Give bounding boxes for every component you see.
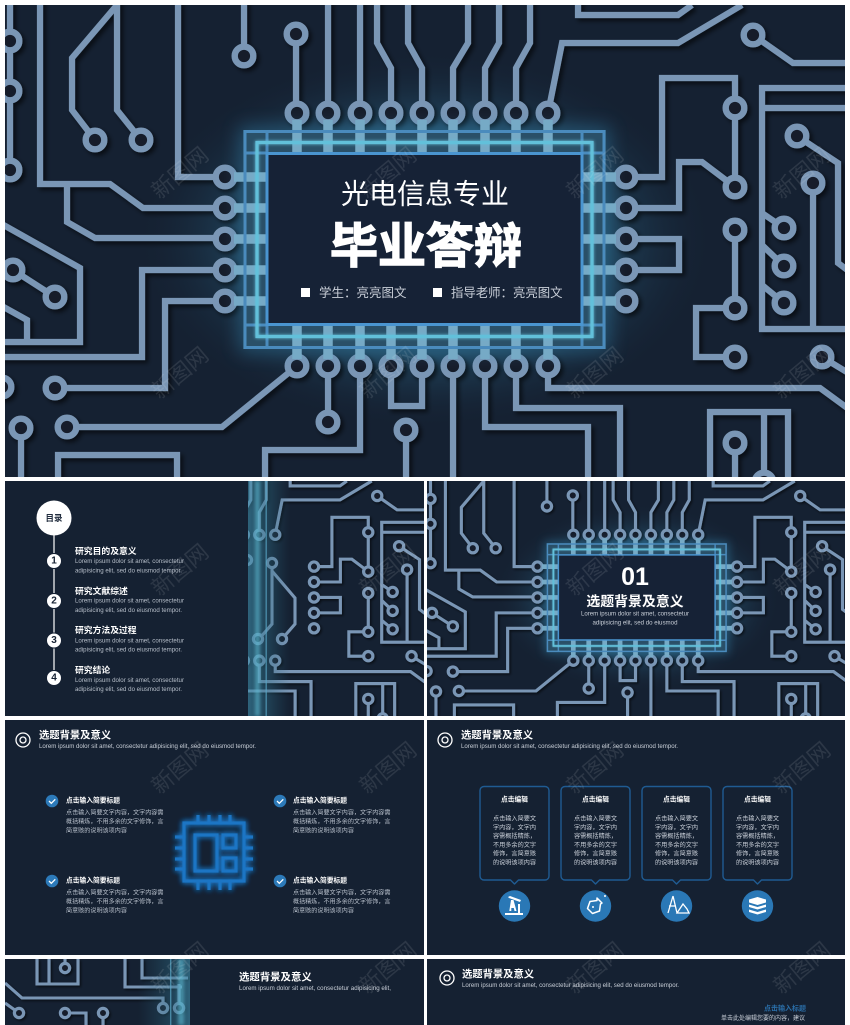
card 1 xyxy=(480,786,549,884)
watermarks: 新图网 xyxy=(769,737,835,799)
point bottom right: 点击输入简要文字内容，文字内容需 xyxy=(293,888,390,896)
card 2 xyxy=(561,786,630,884)
watermarks: 新图网 xyxy=(562,142,628,204)
card 4: 不用多余的文字 xyxy=(736,841,779,849)
point bottom right: 简意赅的说明该项内容 xyxy=(293,906,354,914)
subtitle: 光电信息专业 xyxy=(341,178,509,210)
icon: stacked books xyxy=(742,890,773,922)
watermarks xyxy=(147,142,835,999)
central chip xyxy=(234,120,616,359)
card 3: 修饰，言简意赅 xyxy=(655,850,698,858)
header xyxy=(16,728,256,750)
watermarks: 新图网 xyxy=(147,737,213,799)
icon: compass and mountains xyxy=(661,890,692,922)
card 4: 容需概括精炼， xyxy=(736,832,779,840)
watermarks: 新图网 xyxy=(562,539,628,601)
point top right: 概括精炼，不用多余的文字修饰，言 xyxy=(293,818,390,826)
watermarks: 新图网 xyxy=(355,142,421,204)
header: 选题背景及意义 xyxy=(462,968,535,980)
card 3: 不用多余的文字 xyxy=(655,841,698,849)
point top right: 简意赅的说明该项内容 xyxy=(293,826,354,834)
card 4: 点击编辑 xyxy=(744,794,771,804)
card 1: 点击编辑 xyxy=(501,794,528,804)
icon: flask xyxy=(580,890,611,922)
card 2: 不用多余的文字 xyxy=(574,841,617,849)
header xyxy=(440,968,679,989)
contents item 3 xyxy=(75,624,184,654)
card 2: 修饰，言简意赅 xyxy=(574,850,617,858)
slide 7: cropped text slide xyxy=(427,959,845,1025)
contents item 1 xyxy=(75,545,184,574)
point top right xyxy=(274,795,390,834)
card 1: 的说明该项内容 xyxy=(493,858,536,866)
title and subtitle xyxy=(239,970,391,992)
section title: 选题背景及意义 xyxy=(586,593,684,609)
point bottom left: 简意赅的说明该项内容 xyxy=(66,906,127,914)
main title: 毕业答辩 xyxy=(330,220,522,274)
card 4 xyxy=(723,786,792,884)
card 4: 字内容，文字内 xyxy=(736,823,779,831)
circuit image xyxy=(5,959,190,1025)
section description: adipisicing elit, sed do eiusmod xyxy=(592,620,678,626)
contents item 4: Lorem ipsum dolor sit amet, consectetur xyxy=(75,678,184,684)
card 1: 字内容，文字内 xyxy=(493,823,536,831)
point bottom right xyxy=(274,875,390,914)
watermarks: 新图网 xyxy=(147,142,213,204)
card 2: 点击编辑 xyxy=(582,794,609,804)
contents item 3: adipisicing elit, sed do eiusmod tempor. xyxy=(75,648,182,654)
header: 选题背景及意义 xyxy=(461,728,534,742)
card 3: 容需概括精炼， xyxy=(655,832,698,840)
point bottom left: 概括精炼，不用多余的文字修饰，言 xyxy=(66,898,164,906)
card 1: 不用多余的文字 xyxy=(493,841,536,849)
section description xyxy=(581,612,689,626)
circuit and chip, small xyxy=(422,479,848,723)
slide 4: four points around chip icon xyxy=(5,720,424,955)
point top right: 点击输入简要标题 xyxy=(293,796,347,804)
point top left: 概括精炼，不用多余的文字修饰，言 xyxy=(66,818,164,826)
body line: 单击此处编辑您要的内容，建议 xyxy=(721,1014,805,1022)
point top left: 简意赅的说明该项内容 xyxy=(66,826,127,834)
contents item 1: Lorem ipsum dolor sit amet, consectetur xyxy=(75,559,184,565)
point top left: 点击输入简要文字内容，文字内容需 xyxy=(66,808,164,816)
circuit board background xyxy=(0,0,850,491)
timeline: 3 xyxy=(51,635,57,646)
contents item 1: adipisicing elit, sed do eiusmod tempor. xyxy=(75,568,182,574)
header: 选题背景及意义 xyxy=(39,728,112,742)
contents item 1: 研究目的及意义 xyxy=(75,545,137,556)
contents item 2 xyxy=(75,585,184,614)
watermarks: 新图网 xyxy=(562,937,628,999)
contents item 2: adipisicing elit, sed do eiusmod tempor. xyxy=(75,608,182,614)
contents item 2: 研究文献综述 xyxy=(75,585,128,596)
point top left xyxy=(46,795,164,834)
slide 5: four callout cards xyxy=(427,720,845,955)
contents item 3: 研究方法及过程 xyxy=(75,624,137,635)
student line: 学生：亮亮图文 xyxy=(319,285,407,300)
point bottom left xyxy=(46,875,164,914)
card 2: 容需概括精炼， xyxy=(574,832,617,840)
card 3: 点击输入简要文 xyxy=(655,814,698,822)
card 2: 的说明该项内容 xyxy=(574,858,617,866)
watermarks: 新图网 xyxy=(769,342,835,404)
point bottom left: 点击输入简要文字内容，文字内容需 xyxy=(66,888,164,896)
timeline: 4 xyxy=(51,672,57,684)
card 2: 点击输入简要文 xyxy=(574,814,617,822)
watermarks: 新图网 xyxy=(769,142,835,204)
watermarks: 新图网 xyxy=(769,539,835,601)
circuit side image xyxy=(248,481,424,716)
advisor line: 指导老师：亮亮图文 xyxy=(451,285,563,300)
watermarks: 新图网 xyxy=(769,937,835,999)
timeline xyxy=(46,530,62,686)
header xyxy=(438,728,678,750)
title and subtitle: Lorem ipsum dolor sit amet, consectetur adipisicing elit, xyxy=(239,986,391,992)
card 3 xyxy=(642,786,711,884)
watermarks: 新图网 xyxy=(562,342,628,404)
watermarks: 新图网 xyxy=(355,737,421,799)
card 3: 的说明该项内容 xyxy=(655,858,698,866)
watermarks: 新图网 xyxy=(147,937,213,999)
slide 2: contents xyxy=(0,479,425,723)
heading badge xyxy=(36,500,72,536)
point top left: 点击输入简要标题 xyxy=(66,796,120,804)
header: Lorem ipsum dolor sit amet, consectetur adipisicing elit, sed do eiusmod tempor. xyxy=(461,744,678,750)
card 1: 点击输入简要文 xyxy=(493,814,536,822)
watermarks: 新图网 xyxy=(355,937,421,999)
card 3: 字内容，文字内 xyxy=(655,823,698,831)
section description: Lorem ipsum dolor sit amet, consectetur xyxy=(581,612,689,618)
card 2: 字内容，文字内 xyxy=(574,823,617,831)
watermarks: 新图网 xyxy=(147,342,213,404)
point top right: 点击输入简要文字内容，文字内容需 xyxy=(293,808,390,816)
heading badge: 目录 xyxy=(45,513,63,523)
timeline: 1 xyxy=(51,556,57,566)
contents item 2: Lorem ipsum dolor sit amet, consectetur xyxy=(75,598,184,604)
watermarks: 新图网 xyxy=(562,737,628,799)
slide 1: cover xyxy=(0,0,850,491)
card 1: 容需概括精炼， xyxy=(493,832,536,840)
watermarks: 新图网 xyxy=(355,342,421,404)
card 1: 修饰，言简意赅 xyxy=(493,850,536,858)
contents item 4: 研究结论 xyxy=(75,664,110,675)
card 4: 修饰，言简意赅 xyxy=(736,850,779,858)
timeline: 2 xyxy=(51,596,57,606)
card 4: 点击输入简要文 xyxy=(736,814,779,822)
card 3: 点击编辑 xyxy=(663,794,690,804)
watermarks: 新图网 xyxy=(147,539,213,601)
card 4: 的说明该项内容 xyxy=(736,858,779,866)
contents item 4: adipisicing elit, sed do eiusmod tempor. xyxy=(75,687,182,693)
icon: glowing cpu xyxy=(175,815,253,890)
blue subheading: 点击输入标题 xyxy=(764,1004,806,1012)
header: Lorem ipsum dolor sit amet, consectetur adipisicing elit, sed do eiusmod tempor. xyxy=(462,983,679,989)
slide 6: cropped title with circuit xyxy=(5,959,424,1025)
header: Lorem ipsum dolor sit amet, consectetur adipisicing elit, sed do eiusmod tempor. xyxy=(39,744,256,750)
icon: pump jack xyxy=(499,890,530,922)
point bottom right: 点击输入简要标题 xyxy=(293,876,347,884)
slide 3: section divider xyxy=(422,479,848,723)
point bottom right: 概括精炼，不用多余的文字修饰，言 xyxy=(293,898,390,906)
contents item 3: Lorem ipsum dolor sit amet, consectetur xyxy=(75,638,184,644)
point bottom left: 点击输入简要标题 xyxy=(66,876,120,884)
watermarks: 新图网 xyxy=(355,539,421,601)
section number: 01 xyxy=(621,563,649,591)
title and subtitle: 选题背景及意义 xyxy=(239,970,312,984)
contents item 4 xyxy=(75,664,184,693)
